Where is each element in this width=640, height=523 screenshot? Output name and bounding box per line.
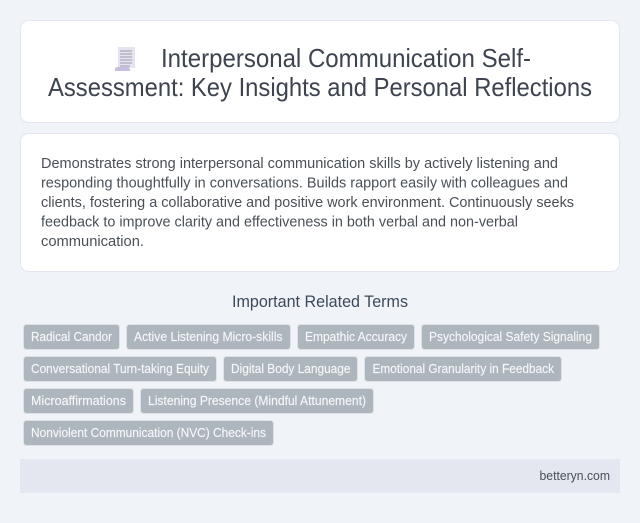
tag: Emotional Granularity in Feedback xyxy=(364,356,562,382)
heading: important related terms: Important Related Terms xyxy=(232,293,408,311)
panel: summary card xyxy=(20,134,620,272)
icon: scroll document xyxy=(115,47,135,71)
tag: Digital Body Language xyxy=(224,356,358,382)
tag: Radical Candor: Radical Candor xyxy=(31,330,112,344)
tag: Digital Body Language: Digital Body Language xyxy=(231,362,350,376)
tag: Empathic Accuracy: Empathic Accuracy xyxy=(305,330,408,344)
tag: Microaffirmations: Microaffirmations xyxy=(31,394,126,408)
summary text: feedback to improve clarity and effectiveness in both verbal and non-verbal xyxy=(41,214,518,230)
tag: Microaffirmations xyxy=(24,388,134,414)
title xyxy=(48,43,592,102)
tag: Active Listening Micro-skills: Active Listening Micro-skills xyxy=(134,330,282,344)
tag: Active Listening Micro-skills xyxy=(126,324,290,350)
footer source text: betteryn.com xyxy=(540,469,610,483)
tag: Nonviolent Communication (NVC) Check-ins xyxy=(24,420,274,446)
summary text: responding thoughtfully in conversations. Builds rapport easily with colleagues and xyxy=(41,174,568,192)
summary text xyxy=(41,155,574,250)
tag: Psychological Safety Signaling xyxy=(422,324,600,350)
tag: Radical Candor xyxy=(24,324,120,350)
panel: title card xyxy=(20,20,620,122)
title: Assessment: Key Insights and Personal Reflections xyxy=(48,72,592,102)
tag: Listening Presence (Mindful Attunement) xyxy=(140,388,374,414)
summary text: communication. xyxy=(41,233,144,250)
tag: Emotional Granularity in Feedback: Emotional Granularity in Feedback xyxy=(372,362,555,376)
tag: Nonviolent Communication (NVC) Check-ins: Nonviolent Communication (NVC) Check-ins xyxy=(31,426,266,440)
tag: Conversational Turn-taking Equity: Conversational Turn-taking Equity xyxy=(31,362,210,376)
tag: Psychological Safety Signaling: Psychological Safety Signaling xyxy=(429,330,592,344)
tag group: related terms xyxy=(24,324,600,446)
tag: Conversational Turn-taking Equity xyxy=(24,356,216,382)
tag: Empathic Accuracy xyxy=(298,324,414,350)
tag: Listening Presence (Mindful Attunement): Listening Presence (Mindful Attunement) xyxy=(148,394,366,408)
summary text: Demonstrates strong interpersonal communication skills by actively listening and xyxy=(41,155,558,172)
footer bar xyxy=(20,459,620,493)
title: Interpersonal Communication Self- xyxy=(161,43,531,73)
summary text: clients, fostering a collaborative and positive work environment. Continuously seeks xyxy=(41,194,574,211)
